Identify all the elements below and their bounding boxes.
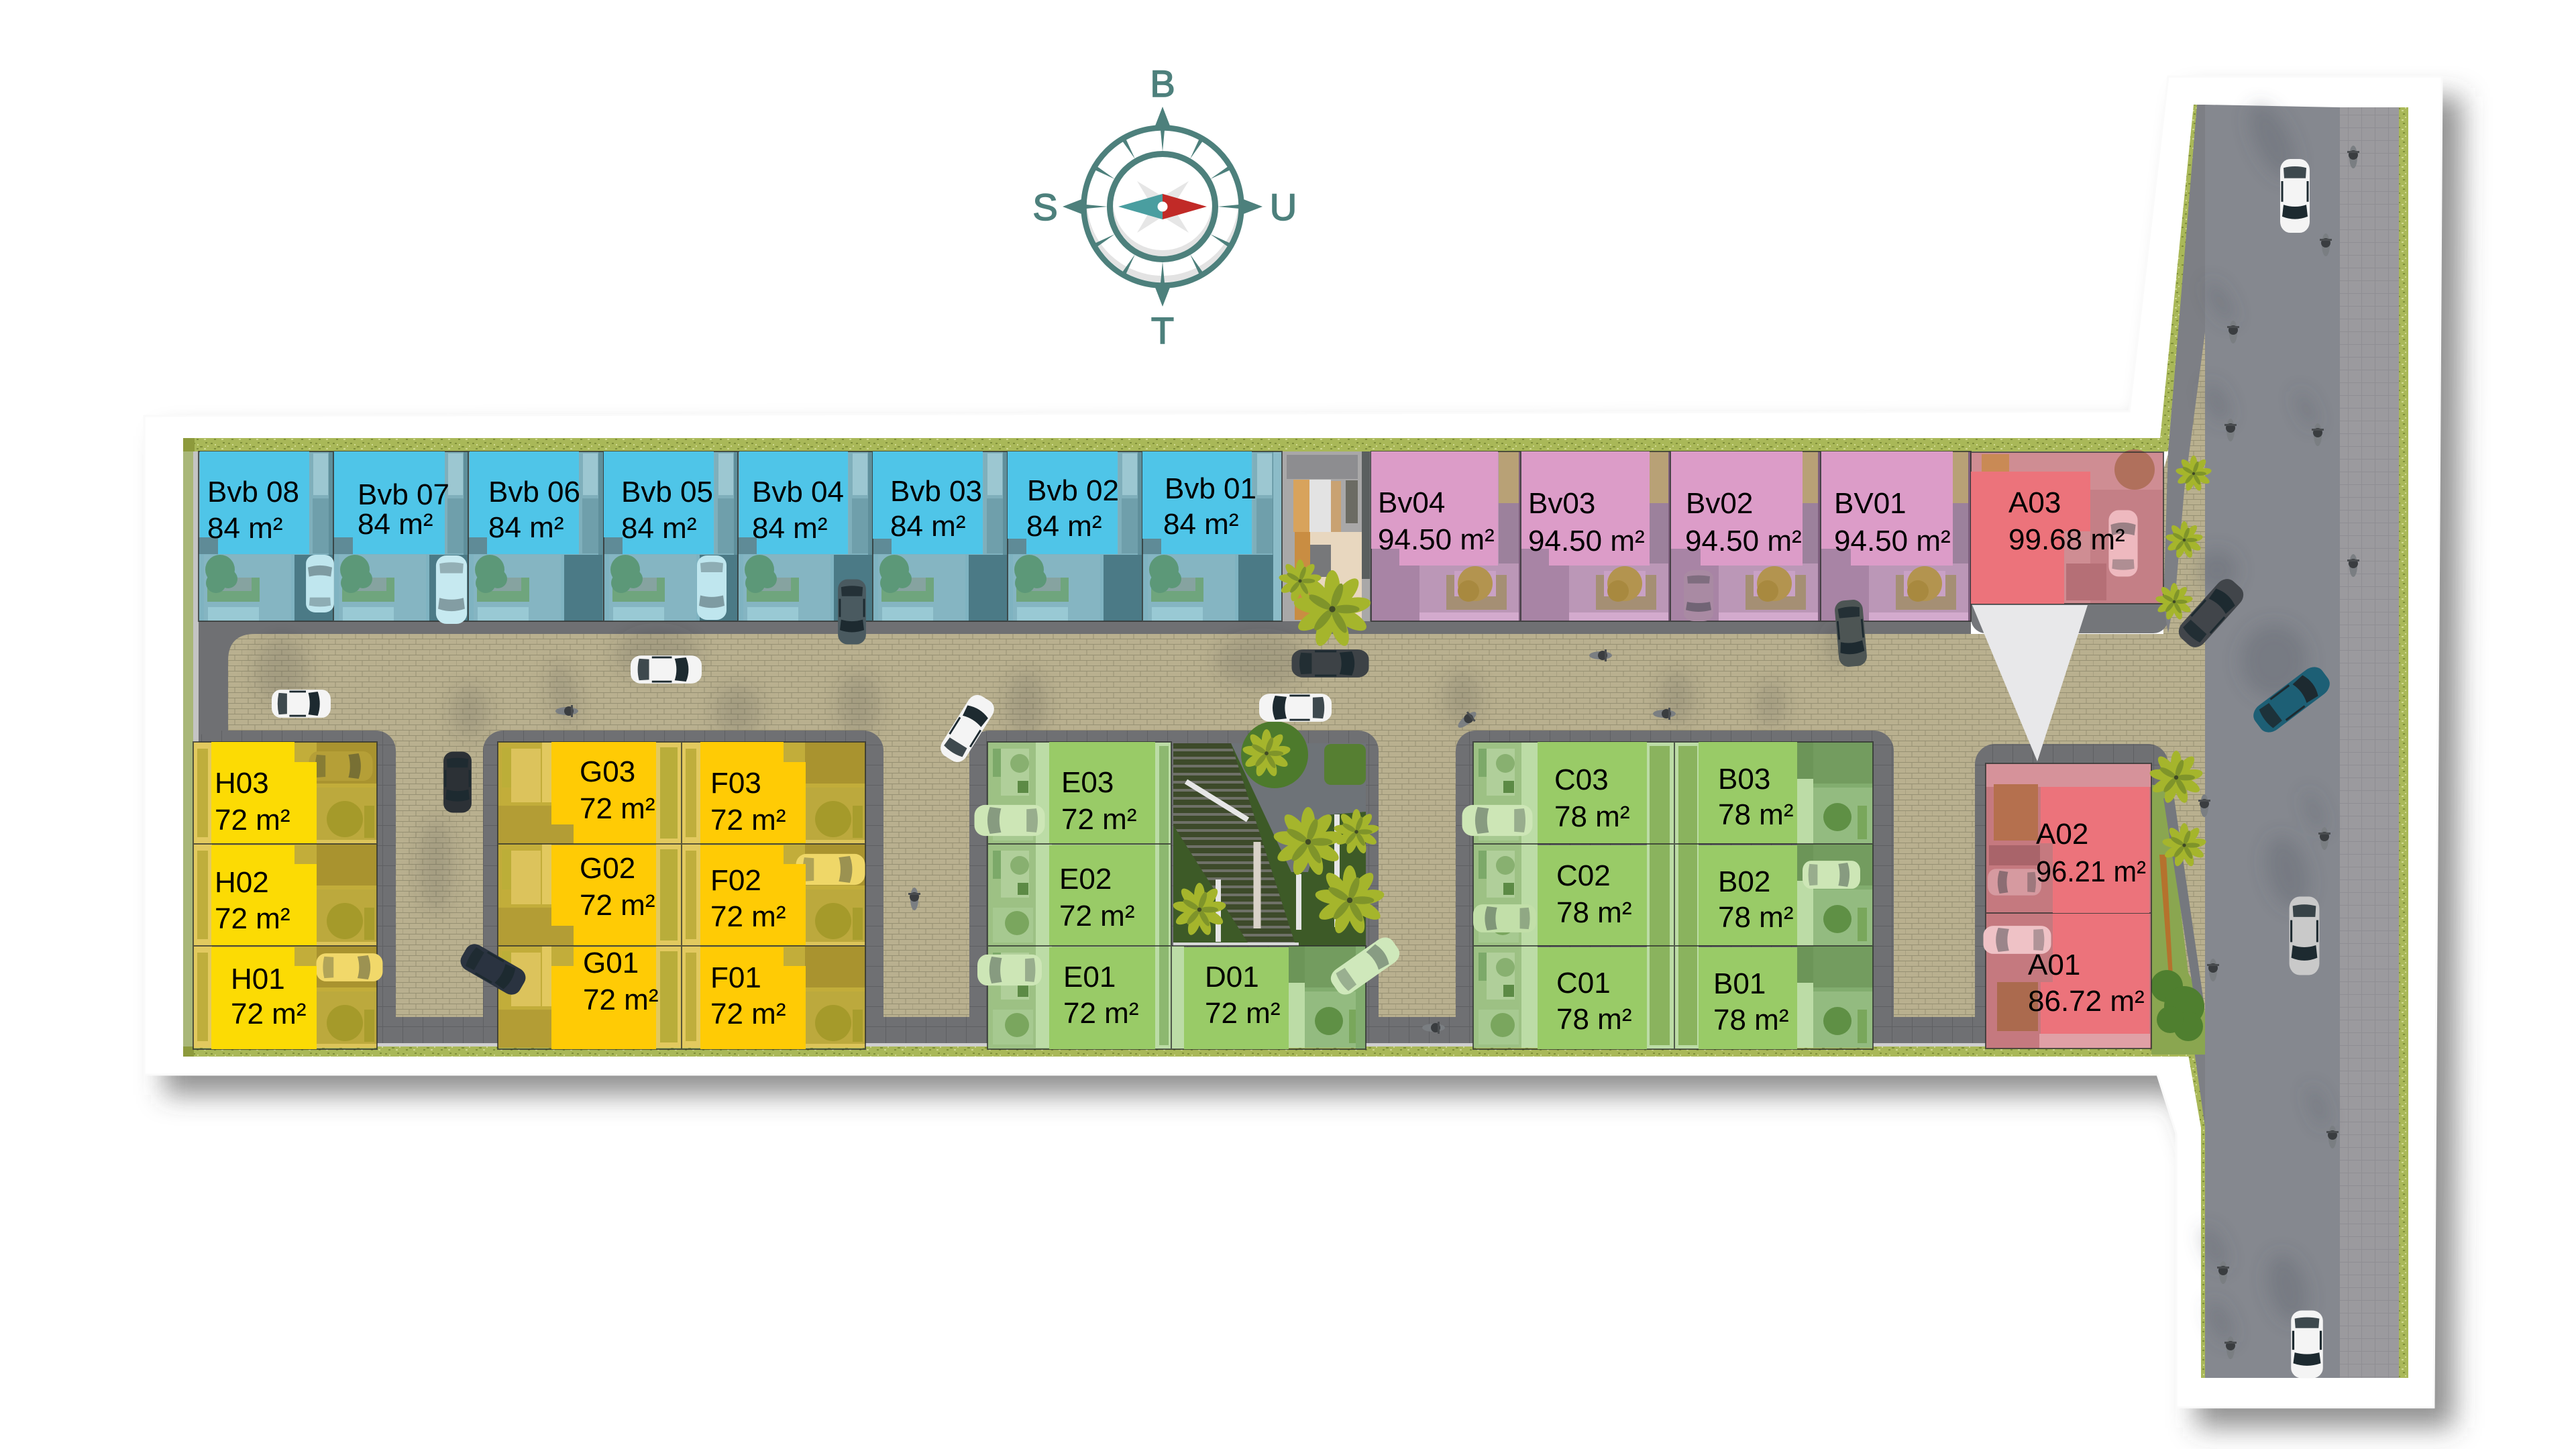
label G03 [551,742,656,843]
label E02 [1049,845,1155,945]
tree shadows on paving [255,621,1853,912]
yellow blocks base [193,742,865,1049]
label Bvb 01 [1142,451,1256,554]
sidewalk bottom band [193,1017,2179,1046]
label Bv02: 94.50 m² [1685,525,1802,557]
plaza [1231,743,1366,872]
label Bv02 [1671,451,1803,566]
label Bv03: 94.50 m² [1528,525,1645,557]
label B02: B02 [1718,865,1770,898]
upper left grass verge [2160,105,2198,451]
label C03 [1538,742,1647,843]
paving between path and road [2168,751,2205,1013]
compass letter U: U [1270,186,1297,228]
sidewalk block E D [969,731,1379,1046]
label Bv04: 94.50 m² [1378,523,1495,556]
label Bvb 03: Bvb 03 [890,475,982,508]
right paving wedge [2163,332,2205,644]
label F01: F01 [710,961,761,994]
label C02: 78 m² [1556,896,1631,929]
label C01: 78 m² [1556,1003,1631,1036]
sidewalk block A [1975,744,2168,1047]
label B03: 78 m² [1718,798,1793,831]
sidewalk block G F [483,731,883,1046]
brick edging [2159,855,2173,977]
label D01 [1184,947,1289,1049]
label G01: G01 [583,947,639,979]
corner house [1282,451,1370,621]
park between E and D blocks [1173,721,1366,946]
label Bvb 06: Bvb 06 [488,476,580,508]
sidewalk below A03 [1971,590,2168,633]
label D01: D01 [1205,961,1259,994]
label F02: 72 m² [710,900,786,933]
label C02 [1538,845,1647,945]
label H03: 72 m² [215,804,290,837]
perimeter grass and left strip [183,438,2189,1057]
compass [1063,62,1263,307]
white benches [1186,782,1337,942]
label Bvb 06 [470,451,580,554]
shrubs [2151,970,2204,1041]
label B01: B01 [1713,967,1766,1000]
internal lane paving [193,332,2205,1050]
label E01: E01 [1063,961,1116,994]
label B01 [1699,947,1797,1049]
label G02: 72 m² [580,889,655,922]
lawn patches [1324,744,1366,785]
label A01: A01 [2028,949,2080,981]
label G02 [551,845,656,945]
label Bvb 05 [604,451,714,554]
lower left grass verge [2188,1055,2205,1378]
brick paving [228,634,2205,1050]
label H02: 72 m² [215,902,290,935]
label B01: 78 m² [1713,1004,1788,1036]
angled path [2163,798,2204,1006]
label A02: A02 [2036,818,2088,851]
top grass [183,438,2167,451]
label Bvb 07 [334,451,449,554]
label E03: 72 m² [1061,803,1136,836]
label Bvb 05: 84 m² [621,512,696,545]
label H01 [211,947,317,1049]
label Bvb 04: Bvb 04 [752,476,844,508]
label G01: 72 m² [583,983,658,1016]
label H03 [211,742,317,843]
label Bvb 05: Bvb 05 [621,476,713,508]
label Bvb 07: Bvb 07 [358,478,449,511]
label H03: H03 [215,767,269,800]
green planting [2151,785,2205,1055]
label Bv04 [1371,451,1498,566]
compass needle [1118,194,1163,219]
road surface [2205,105,2340,1378]
label E01: 72 m² [1063,997,1138,1030]
label G03: 72 m² [580,792,655,825]
label H02 [211,845,317,945]
compass letters: B [1150,62,1175,105]
trellis [1173,743,1295,943]
label H02: H02 [215,866,269,899]
label Bvb 08 [200,451,309,554]
palm trees [1172,455,2212,936]
lower left walkway wedge [2194,1046,2205,1127]
label BV01: BV01 [1834,487,1907,520]
label F03 [700,742,806,843]
label H01: H01 [231,963,285,996]
label Bv03 [1521,451,1650,566]
park lawn [1173,743,1366,946]
road corridor [2160,97,2408,1378]
cars [272,159,2334,1378]
label BV01: 94.50 m² [1834,525,1951,557]
motorbikes and people [555,146,2359,1359]
compass star [1137,181,1189,233]
label A03: 99.68 m² [2008,523,2125,556]
label C01 [1538,947,1647,1049]
label B02: 78 m² [1718,901,1793,934]
white triangle pointer [1972,605,2088,761]
label Bv02: Bv02 [1686,487,1753,520]
label F01: 72 m² [710,998,786,1030]
label Bvb 02: 84 m² [1026,510,1102,543]
label G02: G02 [580,852,635,885]
label E01 [1049,947,1155,1049]
compass points [1063,107,1263,307]
blue villa row base [199,451,1282,621]
green blocks base [987,742,1873,1049]
label Bv04: Bv04 [1378,486,1445,519]
label B03: B03 [1718,763,1770,796]
label Bvb 01: 84 m² [1163,508,1238,541]
label A01 [2028,914,2149,1034]
label A01: 86.72 m² [2028,985,2145,1018]
A03 house base [1971,449,2163,604]
label Bvb 01: Bvb 01 [1165,472,1256,505]
label C02: C02 [1556,859,1611,892]
label F02: F02 [710,864,761,897]
label BV01 [1821,451,1953,566]
label F02 [700,845,806,945]
label B02 [1699,845,1797,945]
label Bvb 06: 84 m² [488,511,564,544]
label E02: E02 [1059,863,1112,896]
label Bvb 08: 84 m² [207,512,282,545]
label F03: F03 [710,767,761,800]
bottom grass [183,1046,2189,1057]
A02 and A01 house base [1986,763,2151,1049]
label A02: 96.21 m² [2036,855,2146,888]
upper left walkway [2163,105,2205,633]
label Bvb 03: 84 m² [890,510,965,543]
label C03: C03 [1554,763,1609,796]
label A03 [1971,472,2125,604]
pink villa row base [1371,451,1971,621]
sidewalk base [199,451,1971,1046]
label E03 [1049,742,1155,843]
label G01 [551,947,658,1049]
compass ticks [1086,130,1239,283]
right grass verge [2399,107,2408,1378]
label Bvb 04: 84 m² [752,512,827,545]
label Bvb 03 [873,451,983,554]
sidewalk block C B [1456,731,1894,1046]
road shadows [2196,97,2331,1346]
compass letter T: T [1151,309,1174,352]
label A02 [2036,787,2149,913]
label F03: 72 m² [710,804,786,837]
compass rings [1084,127,1241,286]
label E02: 72 m² [1059,900,1134,932]
sidewalk block H [193,731,396,1046]
left green strip [183,451,193,1046]
label E03: E03 [1061,766,1114,799]
label F01 [700,947,806,1049]
label B03 [1699,742,1797,843]
right landscaping beside A block [2151,751,2205,1055]
label C01: C01 [1556,967,1611,1000]
right pedestrian walkway [2340,107,2399,1378]
label G03: G03 [580,755,635,788]
label C03: 78 m² [1554,800,1629,833]
label H01: 72 m² [231,998,306,1030]
label Bv03: Bv03 [1528,487,1595,520]
label Bvb 04 [739,451,848,554]
label Bvb 02 [1008,451,1119,554]
label A03: A03 [2008,486,2061,519]
label Bvb 02: Bvb 02 [1027,474,1119,507]
label Bvb 07: 84 m² [358,508,433,541]
label Bvb 08: Bvb 08 [207,476,299,508]
compass letter S: S [1032,186,1058,228]
label D01: 72 m² [1205,997,1280,1030]
